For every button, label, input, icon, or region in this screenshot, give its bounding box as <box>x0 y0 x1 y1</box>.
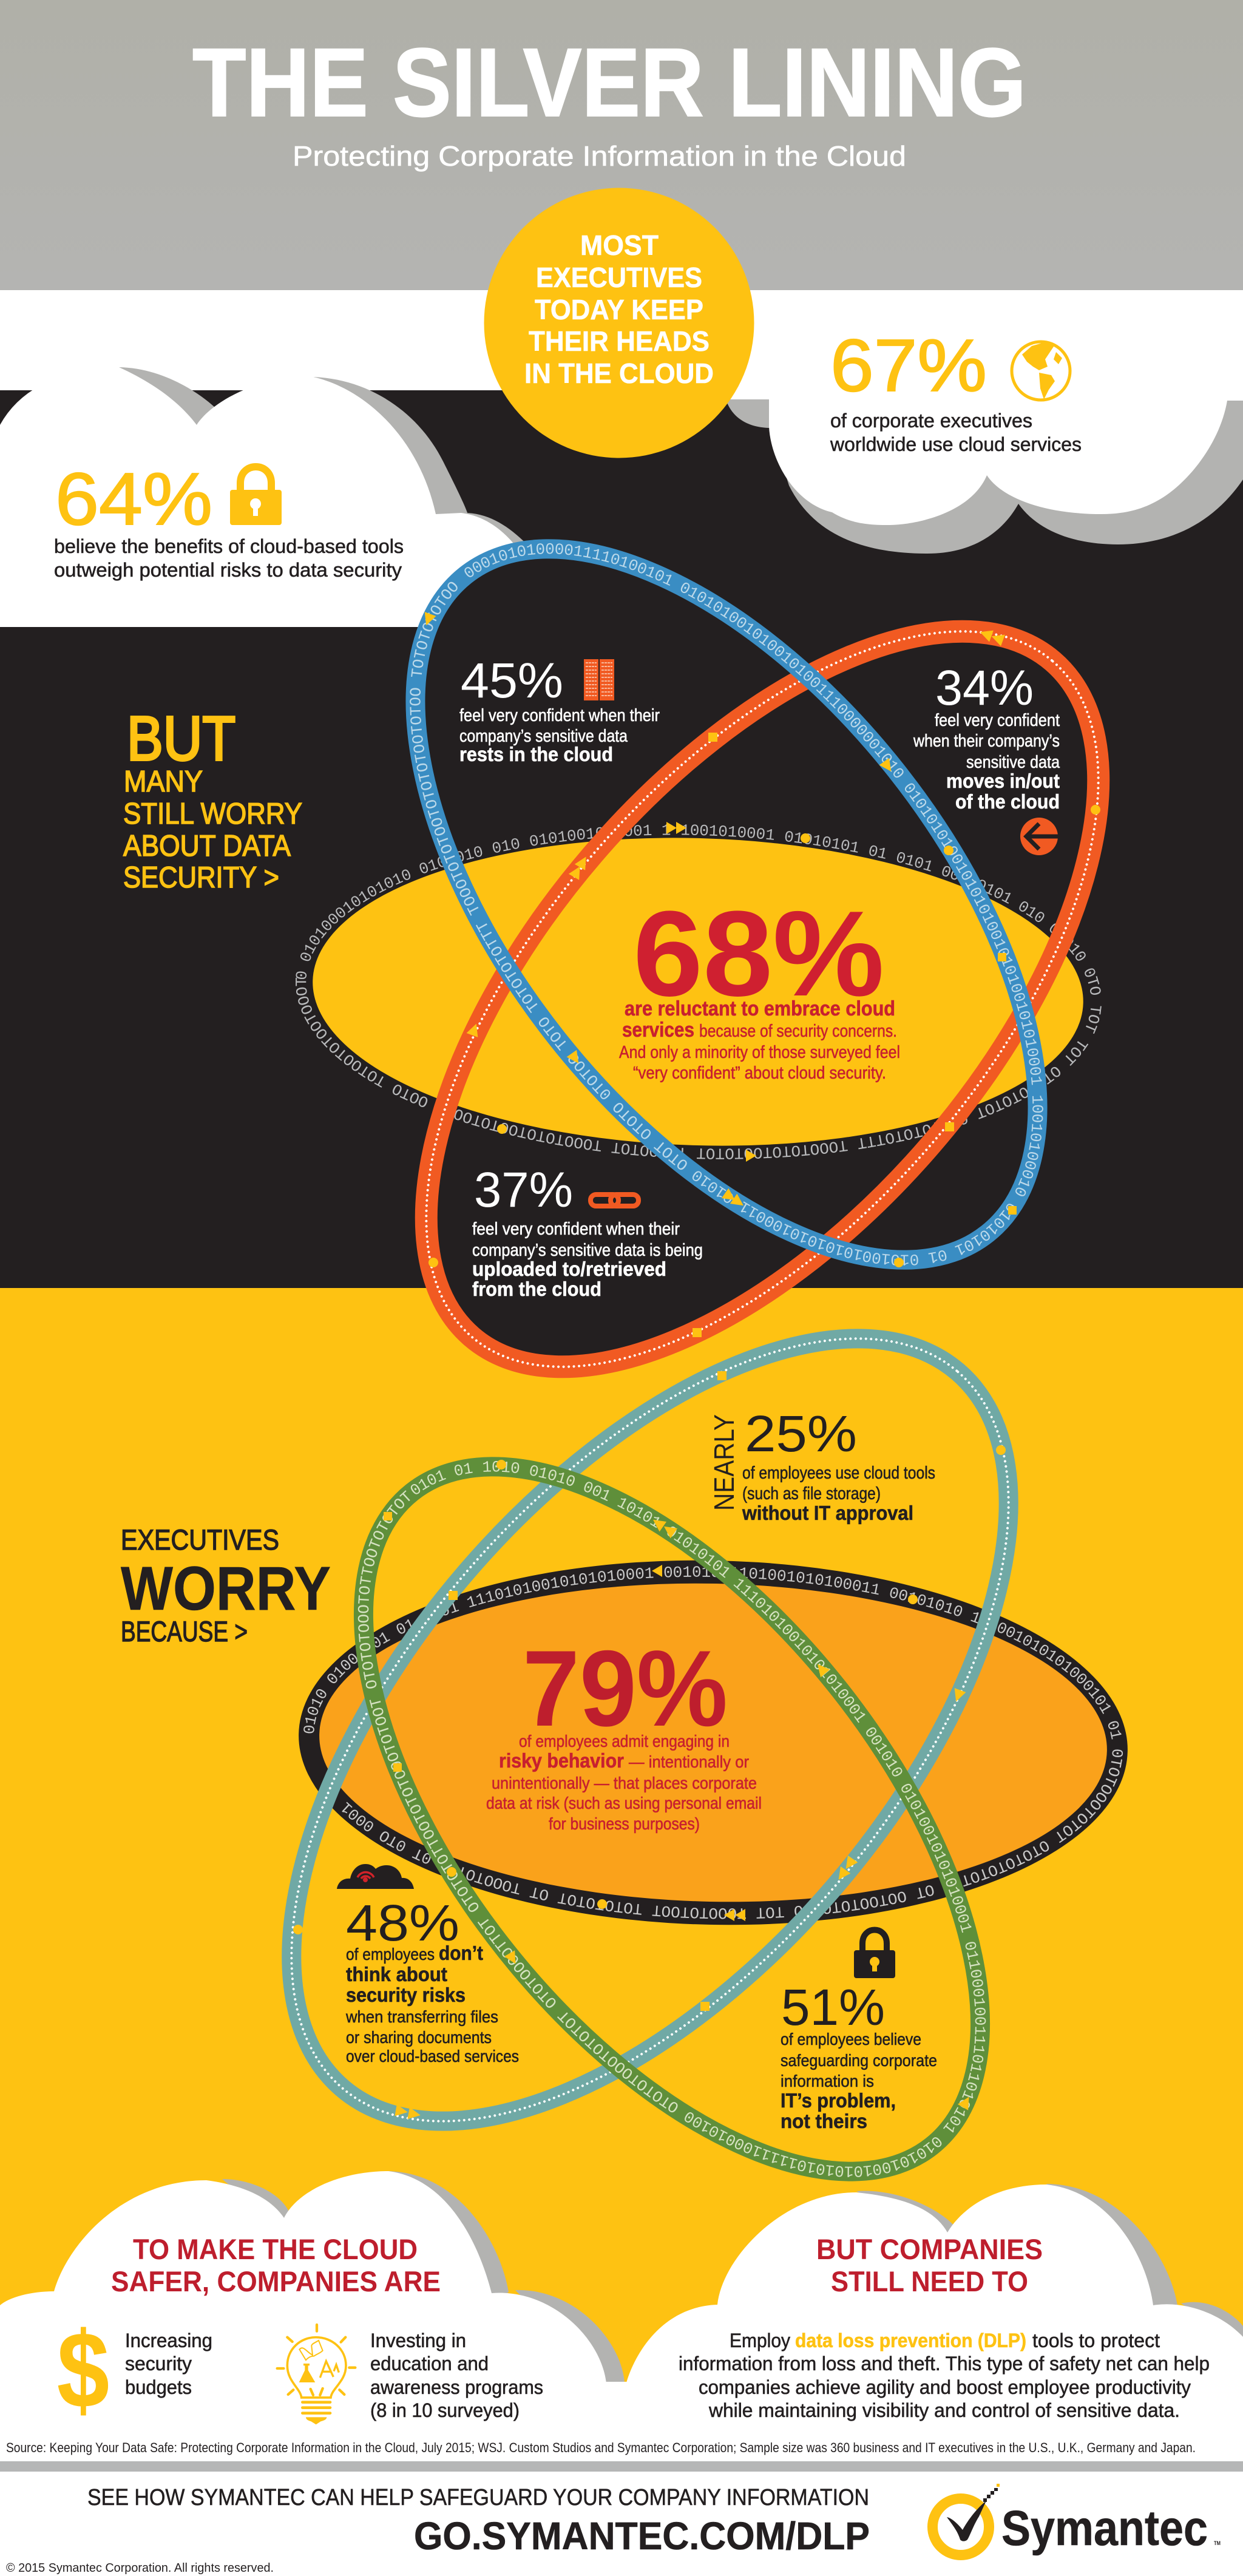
stat: 51 percent: not theirs <box>781 2110 867 2132</box>
stat: 34 percent: feel very confident <box>935 711 1060 730</box>
header band <box>0 0 1243 290</box>
stat: 67 percent: of corporate executives <box>830 410 1032 432</box>
stat: 37 percent: company’s sensitive data is being <box>472 1241 703 1260</box>
stat: 51 percent: 51% <box>781 1979 885 2036</box>
stat: 68 percent <box>619 886 900 1083</box>
circle: most executives <box>484 188 754 458</box>
stat: 79 percent: risky behavior <box>499 1749 624 1772</box>
stat: 25 percent: without IT approval <box>742 1502 913 1524</box>
binary marker: section one middle ring <box>497 822 810 1162</box>
heading: executives worry because: BECAUSE > <box>121 1615 248 1647</box>
text: investing in education <box>370 2330 543 2421</box>
text: increasing security budgets: security <box>125 2353 192 2374</box>
heading: but many still worry: ABOUT DATA <box>123 830 291 863</box>
title: THE SILVER LINING <box>192 28 1026 137</box>
stat: 51 percent: safeguarding corporate <box>781 2051 937 2070</box>
text: increasing security budgets: Increasing <box>125 2330 212 2351</box>
stat: 45 percent: company’s sensitive data <box>459 727 628 746</box>
text: employ data loss prevention <box>679 2330 1210 2421</box>
binary markers: section two middle ring <box>597 1565 918 1921</box>
symantec logo: TM <box>1214 2540 1221 2546</box>
stat: 64 percent <box>54 458 404 581</box>
green ring: 0101 01 1010 01010 001 10101 01010101 11101010010101010001 001010 01010010101010001 011000100111011010101 01010100101010101111100010100 OTOTOTOOOTOTOTOT OTOTOOOOTTOT OTOTOTOTTOOTOTOTOOOTOTOOT OTOTOTOOOTOTTOOTOTOTOT OT OTOTOT OTOOTOTOOTOTOTOT <box>358 1461 986 2177</box>
icon: cloud with wifi <box>337 1864 414 1889</box>
stat: 25 percent: of employees use cloud tools <box>742 1463 935 1483</box>
stat: 48 percent: don’t <box>439 1942 483 1964</box>
stat: 37 percent: uploaded to/retrieved <box>472 1258 666 1280</box>
stat: 25 percent: (such as file storage) <box>742 1484 881 1503</box>
binary ring: middle: 0 010100010101010 0101010 010 0101001001001 1 1001010001 01010101 01 0101 00010101 010 01010 0TO TOT TOT OTO OTOTOT OTOTOTOTOTTT TOOOTOTOTOOTOTOT TOTOOTOT TOOOTOTOTOOTOTOOTT OOTO TOTOOTOTOOTOOOTTOTOT <box>296 824 1102 1159</box>
heading: but many still worry <box>123 703 302 894</box>
stat: 48 percent <box>337 1864 519 2066</box>
white band <box>0 290 1243 390</box>
heading: but many still worry: MANY <box>124 765 203 798</box>
cloud: 64 percent <box>0 367 546 627</box>
stat: 51 percent: IT’s problem, <box>781 2089 896 2112</box>
text: increasing security budgets: budgets <box>125 2376 192 2398</box>
stat: 64 percent: 64% <box>55 458 212 540</box>
grey footer bar <box>0 2461 1243 2472</box>
stat: 48 percent: of employees <box>346 1945 435 1964</box>
icon: arrow in circle <box>1020 818 1059 855</box>
stat: 45 percent: 45% <box>461 653 563 708</box>
central orange ellipse with dark border <box>295 1552 1131 1933</box>
stat: 34 percent: sensitive data <box>966 753 1060 772</box>
stat: 51 percent: of employees believe <box>781 2030 921 2049</box>
stat: 67 percent <box>830 324 1082 455</box>
stat: 34 percent <box>913 660 1060 855</box>
white bottom area <box>0 2382 1243 2576</box>
stat: 79 percent: unintentionally — that places corporate <box>492 1774 757 1792</box>
stat: 48 percent: think about <box>346 1963 447 1985</box>
yellow section background <box>0 1288 1243 2387</box>
stat: 68 percent: “very confident” about cloud security. <box>633 1063 886 1083</box>
stat: 37 percent: from the cloud <box>472 1278 601 1300</box>
stat: 48 percent: when transferring files <box>345 2007 498 2026</box>
heading: but many still worry: SECURITY > <box>123 861 279 894</box>
call to action: SEE HOW SYMANTEC CAN HELP SAFEGUARD YOUR COMPANY INFORMATION <box>87 2485 869 2510</box>
binary ring: middle two: 01010 0100 001 01 0101 11101010010101010001 001010 1101001010100011 00101010 101001010101000101 01 0TOTOOOTOTOT OTOTOTOTOTOT OT OOTOOTOTOTOO TOT TOOOTOTOOT TOTOTOTOT OT TOOOTOTOT 0T 0TO 0001 <box>303 1566 1123 1919</box>
stat: 67 percent: 67% <box>830 324 987 407</box>
heading: to make the cloud safer: SAFER, COMPANIES ARE <box>111 2265 441 2297</box>
blue ring: 00010101000011110100101 0101010010100101001110000001010 01010101001010101001010100101010001 10010100010 01010101 01 01010010101010100011 01010 OTOT OTOTO 0TOTOO TOTO TOTOTOTOTTT TOOOTOTOTOOTOTOTOTOOTOTOO TOTOTOTOTOO OTOOOTOTTOOOTOTOTTTOTOTOTOOTOTTTOOOOTOTOT <box>410 543 1043 1266</box>
stat: 34 percent: of the cloud <box>955 790 1060 813</box>
stat: 79 percent: data at risk (such as using personal email <box>486 1794 762 1812</box>
text: investing in education: Investing in <box>370 2330 466 2351</box>
orange ring markers <box>428 626 1100 1337</box>
heading: to make the cloud safer <box>111 2233 441 2297</box>
heading: executives worry because <box>121 1524 331 1647</box>
stat: 51 percent <box>781 1930 937 2132</box>
circle: most executives: MOST <box>580 229 659 261</box>
stat: 48 percent: 48% <box>346 1894 459 1951</box>
heading: executives worry because: WORRY <box>121 1554 331 1623</box>
orange ring <box>303 516 1222 1482</box>
stat: 45 percent: rests in the cloud <box>459 743 613 765</box>
stat: 64 percent: believe the benefits of cloud-based tools <box>54 535 404 557</box>
green ring markers <box>384 1460 974 2110</box>
stat: 79 percent: — intentionally or <box>629 1752 749 1771</box>
stat: 45 percent <box>459 653 660 765</box>
circle: most executives: THEIR HEADS <box>529 325 710 357</box>
icon: padlock <box>230 467 282 525</box>
circle: most executives: IN THE CLOUD <box>524 358 714 389</box>
stat: 25 percent: 25% <box>745 1405 857 1462</box>
subtitle: Protecting Corporate Information in the Cloud <box>293 140 906 172</box>
stat: 34 percent: 34% <box>935 660 1034 716</box>
stat: 37 percent: feel very confident when their <box>472 1219 680 1239</box>
stat: 79 percent: 79% <box>523 1628 728 1749</box>
text: employ data loss prevention: information from loss and theft. This type of safety net can help <box>679 2353 1210 2374</box>
circle: most executives: EXECUTIVES <box>536 262 702 293</box>
copyright: © 2015 Symantec Corporation. All rights reserved. <box>6 2561 274 2575</box>
blue ring markers <box>421 612 1017 1267</box>
nearly rotated label: NEARLY <box>708 1414 740 1511</box>
text: investing in education: (8 in 10 surveyed) <box>370 2399 520 2421</box>
stat: 68 percent: And only a minority of those surveyed feel <box>619 1043 900 1062</box>
call to action: GO.SYMANTEC.COM/DLP <box>414 2514 870 2558</box>
heading: but companies still need to: BUT COMPANIES <box>816 2233 1043 2265</box>
teal ring markers <box>293 1371 1006 2121</box>
text: investing in education: awareness programs <box>370 2376 543 2398</box>
text: investing in education: education and <box>370 2353 489 2374</box>
stat: 79 percent: of employees admit engaging in <box>519 1732 730 1751</box>
icon: light bulb <box>277 2325 355 2424</box>
stat: 68 percent: are reluctant to embrace cloud <box>625 997 895 1020</box>
text: employ data loss prevention: while maintaining visibility and control of sensitive data. <box>708 2399 1180 2421</box>
icon: dark padlock <box>854 1930 895 1978</box>
icon: server towers <box>584 659 614 700</box>
stat: 25 percent <box>708 1405 935 1524</box>
stat: 34 percent: moves in/out <box>946 770 1060 792</box>
stat: 68 percent: services <box>622 1019 694 1042</box>
icon: dollar sign: $ <box>57 2310 109 2430</box>
heading: but companies still need to <box>816 2233 1043 2297</box>
stat: 48 percent: over cloud-based services <box>346 2047 519 2066</box>
circle: most executives: TODAY KEEP <box>535 294 703 325</box>
text: increasing security budgets <box>125 2330 212 2398</box>
stat: 67 percent: worldwide use cloud services <box>830 433 1082 455</box>
stat: 64 percent: outweigh potential risks to data security <box>54 559 402 581</box>
ring interior fills <box>296 441 1222 1482</box>
heading: executives worry because: EXECUTIVES <box>121 1524 279 1556</box>
teal ring <box>158 1214 1142 2246</box>
cloud: 67 percent <box>722 388 1243 554</box>
icon: chain link <box>591 1195 638 1206</box>
cloud: but companies still need to <box>626 2184 1243 2383</box>
symantec logo <box>932 2484 1221 2556</box>
cloud: to make the cloud safer <box>0 2171 625 2383</box>
stat: 37 percent: 37% <box>474 1162 573 1218</box>
stat: 48 percent: security risks <box>346 1984 466 2006</box>
heading: but many still worry: STILL WORRY <box>123 798 302 830</box>
heading: but companies still need to: STILL NEED TO <box>831 2265 1028 2297</box>
stat: 79 percent: for business purposes) <box>549 1814 700 1833</box>
central yellow ellipse <box>308 827 1088 1157</box>
stat: 68 percent: because of security concerns. <box>699 1022 897 1041</box>
heading: to make the cloud safer: TO MAKE THE CLOUD <box>133 2233 418 2265</box>
text: employ data loss prevention: data loss prevention (DLP) <box>795 2330 1026 2351</box>
stat: 45 percent: feel very confident when their <box>459 706 660 725</box>
stat: 51 percent: information is <box>781 2072 874 2090</box>
symantec logo: Symantec <box>1001 2501 1208 2556</box>
stat: 37 percent <box>472 1162 703 1300</box>
dark section background <box>0 390 1243 1288</box>
stat: 68 percent: 68% <box>633 886 884 1022</box>
stat: 48 percent: or sharing documents <box>346 2028 492 2047</box>
text: employ data loss prevention: tools to protect <box>1032 2330 1160 2351</box>
call to action <box>87 2485 870 2558</box>
text: employ data loss prevention: Employ <box>730 2330 790 2351</box>
stat: 79 percent <box>486 1628 762 1833</box>
text: employ data loss prevention: companies achieve agility and boost employee productivity <box>699 2376 1191 2398</box>
stat: 34 percent: when their company’s <box>913 731 1060 751</box>
heading: but many still worry: BUT <box>127 703 235 773</box>
icon: globe <box>1012 342 1070 400</box>
